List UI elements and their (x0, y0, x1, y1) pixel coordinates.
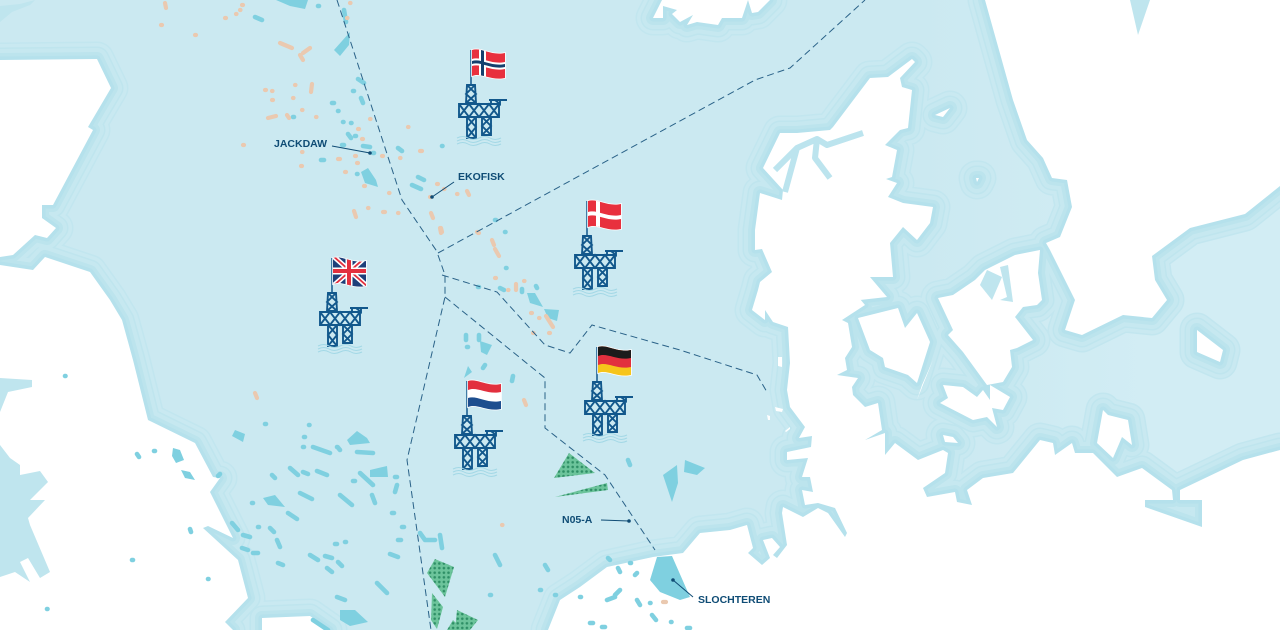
rig with Danish flag (573, 196, 623, 296)
blue gas fields (47, 0, 705, 630)
label: Ekofisk: EKOFISK (458, 171, 505, 183)
rig with German flag (583, 342, 633, 442)
label: Slochteren (671, 578, 770, 606)
small white islets in the bands (767, 357, 933, 432)
rig with UK flag (318, 253, 368, 354)
label: Jackdaw (274, 138, 372, 155)
rig with Dutch flag (453, 376, 503, 476)
beige oil fields (161, 3, 666, 602)
label: Jackdaw: JACKDAW (274, 138, 327, 150)
label: N05-A: N05-A (562, 514, 593, 526)
label: N05-A (562, 514, 631, 526)
maritime boundary lines (337, 0, 865, 630)
rig with Norwegian flag (457, 45, 507, 146)
label: Slochteren: SLOCHTEREN (698, 594, 770, 606)
green wind-farm zones (427, 453, 608, 630)
label: Ekofisk (430, 171, 505, 199)
